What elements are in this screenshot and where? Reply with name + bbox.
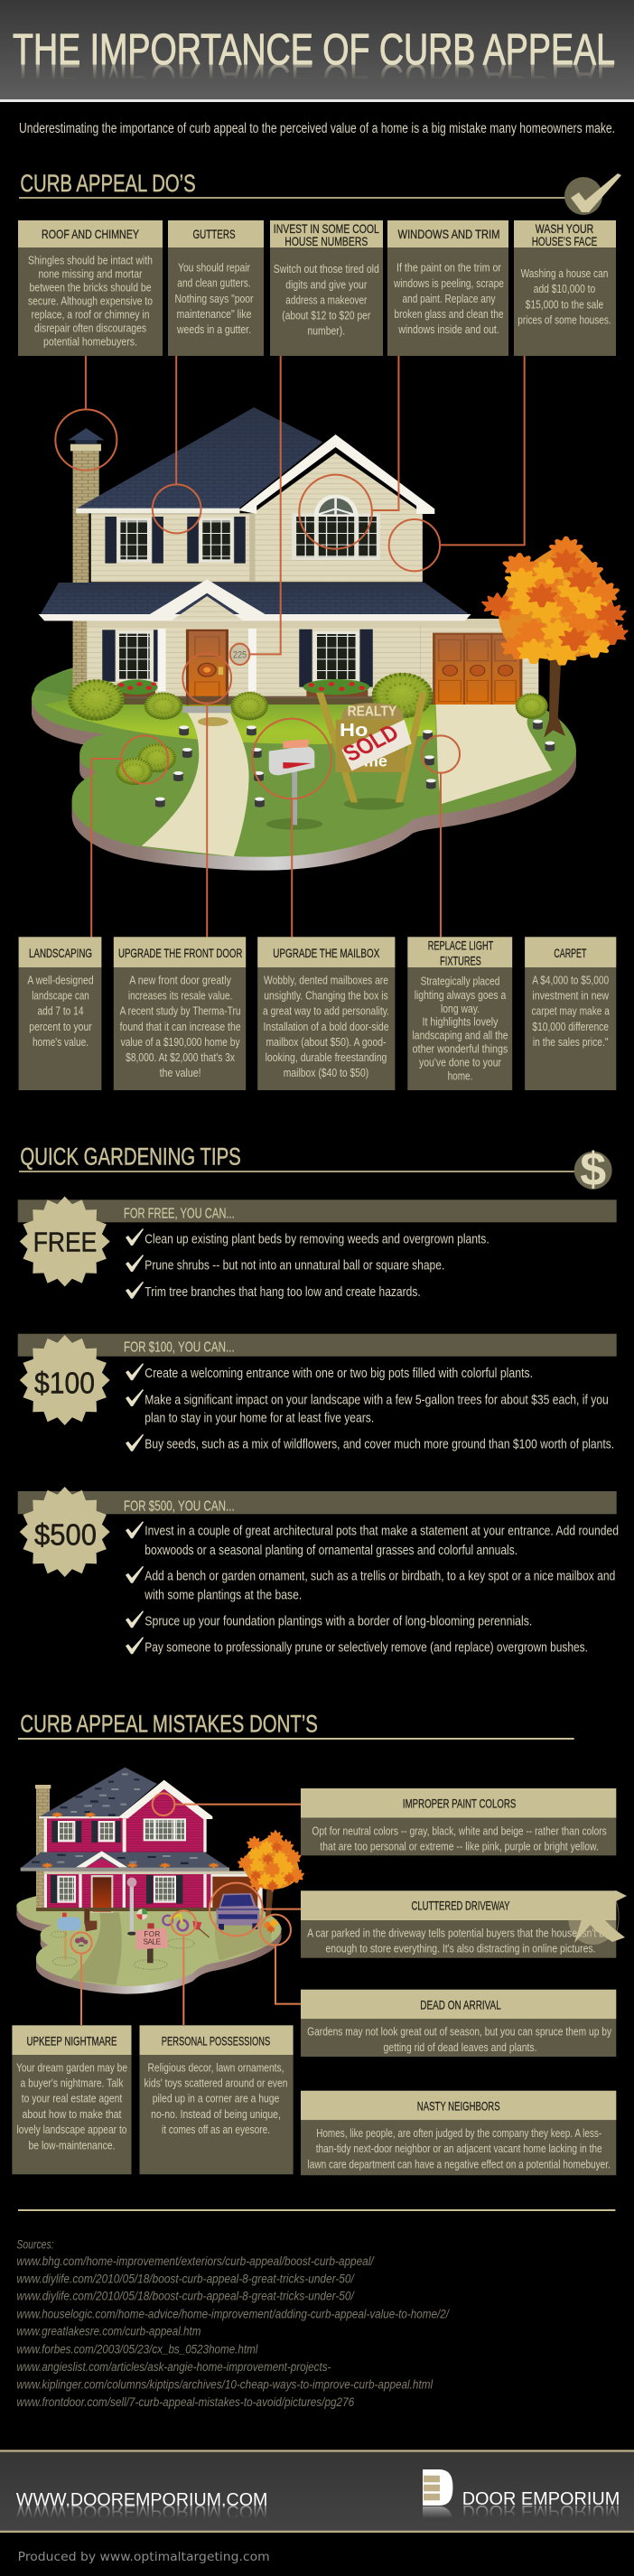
toys: [163, 1915, 210, 1937]
panel: nasty neighbors: NASTY NEIGHBORS: [417, 2099, 500, 2114]
section heading: curb appeal do's: [19, 170, 621, 215]
panel: personal possessions: PERSONAL POSSESSIONS: [162, 2033, 270, 2048]
panel: windows and trim: WINDOWS AND TRIM: [397, 227, 500, 241]
panel: wash your house's face: add $10,000 to: [534, 283, 595, 295]
callout circles and leader lines: [70, 1793, 301, 2025]
sources list: [16, 2237, 450, 2409]
icon: check mark: [564, 173, 621, 215]
realty sold sign: Ho: [340, 720, 368, 741]
tip group: $500: Spruce up your foundation plantings with a border of long-blooming perennials.: [145, 1614, 532, 1629]
production credit: Produced by www.optimaltargeting.com: [18, 2550, 270, 2564]
panel: cluttered driveway: [301, 1890, 616, 1958]
panel: cluttered driveway: CLUTTERED DRIVEWAY: [412, 1899, 510, 1913]
panel: carpet: in the sales price.": [533, 1036, 609, 1049]
panel: landscaping: LANDSCAPING: [29, 946, 92, 960]
beach ball: [136, 1909, 147, 1919]
website url: WWW.DOOREMPORIUM.COM: [16, 2490, 267, 2510]
tip group: $500: [18, 1487, 619, 1656]
door emporium logo: DOOR EMPORIUM: [462, 2489, 620, 2509]
chimney: [35, 1785, 51, 1908]
tip group: $100: plan to stay in your home for at least five years.: [145, 1410, 374, 1425]
panel: improper paint colors: IMPROPER PAINT COLORS: [403, 1797, 516, 1811]
walkway: [70, 1912, 122, 1985]
panel: windows and trim: windows inside and out.: [397, 323, 499, 336]
ground floor windows: [102, 629, 373, 691]
panel: roof and chimney: [18, 220, 163, 356]
badge: free: FREE: [33, 1227, 97, 1258]
panel: upgrade the mailbox: Wobbly, dented mailboxes are: [264, 974, 388, 986]
tip group: $500: FOR $500, YOU CAN...: [124, 1498, 235, 1514]
panel: roof and chimney: disrepair often discourages: [34, 322, 146, 334]
panel: windows and trim: [387, 220, 508, 356]
arched gable window: [292, 495, 380, 560]
panel: roof and chimney: between the bricks should be: [29, 282, 152, 294]
step: [182, 706, 231, 713]
panel: replace light fixtures: [407, 937, 512, 1090]
porch roof: [21, 1851, 229, 1871]
panel: personal possessions: kids' toys scattered around or even: [145, 2077, 288, 2090]
panel: landscaping: A well-designed: [27, 974, 94, 986]
front gable trim: [238, 434, 434, 514]
porch roof: [39, 583, 471, 621]
panel: nasty neighbors: [301, 2091, 616, 2175]
garden weeds: [51, 1931, 194, 1969]
house number plate: [231, 645, 248, 664]
panel: landscaping: percent to your: [29, 1021, 92, 1033]
panel: landscaping: add 7 to 14: [38, 1005, 84, 1018]
panel: replace light fixtures: REPLACE LIGHT: [428, 938, 494, 952]
ground floor: [36, 1871, 263, 1913]
sources list: www.forbes.com/2003/05/23/cx_bs_0523home.html: [16, 2342, 258, 2356]
illustration: beige house on island: [32, 356, 627, 937]
divider rule: [18, 2209, 615, 2211]
section heading: quick gardening tips: QUICK GARDENING TIPS: [20, 1143, 241, 1171]
panel: replace light fixtures: home.: [448, 1069, 472, 1082]
sources list: www.kiplinger.com/columns/kiptips/archives/10-cheap-ways-to-improve-curb-appeal.html: [16, 2377, 434, 2391]
tip group: free: FOR FREE, YOU CAN...: [124, 1207, 235, 1222]
panel: dead on arrival: getting rid of dead leaves and plants.: [383, 2041, 536, 2054]
callout circles and leader lines: [55, 356, 525, 937]
panel: replace light fixtures: Strategically placed: [421, 975, 499, 987]
panel: upgrade the mailbox: looking, durable freestanding: [266, 1051, 387, 1064]
panel: landscaping: landscape can: [32, 990, 89, 1003]
dead flowers: [75, 1937, 88, 1946]
panel: personal possessions: it comes off as an eyesore.: [162, 2123, 270, 2136]
leaf pile: [263, 1918, 279, 1934]
panel: upgrade the mailbox: UPGRADE THE MAILBOX: [273, 946, 380, 960]
walkway: [142, 712, 249, 856]
panel: carpet: $10,000 difference: [532, 1021, 609, 1033]
panel: upgrade the front door: value of a $190,000 home by: [121, 1036, 240, 1049]
panel: house numbers: HOUSE NUMBERS: [284, 234, 368, 248]
section heading: quick gardening tips: [19, 1143, 612, 1196]
realty sold sign: [316, 693, 427, 810]
ground floor siding: [87, 621, 421, 698]
panel: roof and chimney: ROOF AND CHIMNEY: [42, 227, 139, 241]
panel: landscaping: home's value.: [33, 1036, 89, 1049]
realty sold sign: me: [364, 752, 387, 770]
tip group: $500: with some plantings at the base.: [144, 1587, 302, 1602]
panel: upkeep nightmare: [12, 2025, 132, 2174]
panel: upgrade the front door: increases its resale value.: [128, 990, 232, 1003]
badge: free: [20, 1196, 110, 1286]
realty sold sign: REALTY: [348, 704, 396, 719]
panel: wash your house's face: $15,000 to the sale: [526, 298, 603, 311]
panel: roof and chimney: none missing and mortar: [38, 267, 143, 280]
porch gable: [149, 579, 266, 621]
panel: replace light fixtures: long way.: [441, 1003, 480, 1015]
panel: personal possessions: no-no. Instead of being unique,: [151, 2108, 281, 2121]
panel: personal possessions: piled up in a corner are a huge: [153, 2093, 279, 2105]
panel: wash your house's face: [514, 220, 616, 356]
tip group: free: Clean up existing plant beds by removing weeds and overgrown plants.: [145, 1232, 489, 1247]
panel: upkeep nightmare: about how to make that: [22, 2108, 122, 2121]
tip group: $100: [18, 1334, 617, 1452]
upper left window pair: [105, 517, 246, 564]
panel: upgrade the front door: A recent study by Therma-Tru: [120, 1005, 241, 1018]
sources list: www.frontdoor.com/sell/7-curb-appeal-mistakes-to-avoid/pictures/pg276: [16, 2395, 355, 2409]
panel: upkeep nightmare: UPKEEP NIGHTMARE: [27, 2033, 117, 2048]
panel: gutters: [168, 220, 264, 356]
tip group: $100: Create a welcoming entrance with one or two big pots filled with colorful plants.: [145, 1366, 533, 1381]
panel: personal possessions: Religious decor, lawn ornaments,: [148, 2061, 284, 2074]
panel: upgrade the front door: [114, 937, 246, 1090]
driveway: [215, 1915, 272, 1961]
panel: gutters: GUTTERS: [193, 227, 235, 241]
rocking chair: [84, 1909, 97, 1931]
house number plate: 225: [233, 649, 247, 660]
panel: house numbers: INVEST IN SOME COOL: [274, 221, 379, 236]
autumn tree: [238, 1831, 303, 1917]
front door: [186, 630, 228, 705]
sources list: www.diylife.com/2010/05/18/boost-curb-appeal-8-great-tricks-under-50/: [16, 2290, 355, 2303]
panel: upgrade the mailbox: [257, 937, 395, 1090]
for sale sign: FOR: [144, 1930, 161, 1938]
panel: gutters: weeds in a gutter.: [176, 323, 251, 336]
main roof: [39, 1768, 157, 1818]
sources list: www.houselogic.com/home-advice/home-improvement/adding-curb-appeal-value-to-home/2/: [16, 2307, 450, 2320]
tip group: free: Prune shrubs -- but not into an unnatural ball or square shape.: [145, 1258, 444, 1274]
mailbox: [266, 739, 322, 830]
upper storey: [44, 1787, 207, 1853]
sources list: www.diylife.com/2010/05/18/boost-curb-appeal-8-great-tricks-under-50/: [16, 2272, 355, 2285]
panel: wash your house's face: HOUSE'S FACE: [532, 234, 597, 248]
section heading: curb appeal do's: CURB APPEAL DO’S: [20, 170, 196, 197]
panel: house numbers: digits and give your: [285, 279, 367, 292]
panel: dead on arrival: DEAD ON ARRIVAL: [420, 1997, 501, 2011]
panel: upgrade the mailbox: Installation of a bold door-side: [264, 1021, 389, 1033]
garden lights: [155, 720, 555, 807]
mailbox: [57, 1913, 81, 1960]
panel: upgrade the front door: UPGRADE THE FRONT DOOR: [118, 946, 242, 960]
panel: replace light fixtures: landscaping and all the: [412, 1030, 508, 1042]
panel: upgrade the mailbox: a great way to add personality.: [263, 1005, 389, 1018]
panel: house numbers: number).: [307, 325, 345, 338]
panel: windows and trim: and paint. Replace any: [403, 293, 496, 305]
sources list: www.angieslist.com/articles/ask-angie-home-improvement-projects-: [16, 2360, 331, 2374]
tip group: $500: boxwoods or a seasonal planting of ornamental grasses and colorful annuals.: [145, 1543, 517, 1558]
sources list: www.bhg.com/home-improvement/exteriors/curb-appeal/boost-curb-appeal/: [16, 2254, 375, 2268]
panel: windows and trim: windows is peeling, scrape: [393, 277, 504, 290]
door emporium logo: [423, 2469, 620, 2521]
panel: upkeep nightmare: a buyer's nightmare. Talk: [20, 2077, 124, 2090]
parked car: [216, 1893, 259, 1930]
panel: upgrade the mailbox: mailbox (about $50). A good-: [266, 1036, 387, 1049]
garage door: [433, 633, 522, 705]
panel: house numbers: (about $12 to $20 per: [282, 310, 370, 322]
tip group: $100: FOR $100, YOU CAN...: [124, 1340, 235, 1356]
panel: roof and chimney: replace, a roof or chimney in: [31, 309, 150, 322]
panel: roof and chimney: secure. Although expensive to: [28, 294, 153, 307]
panel: upkeep nightmare: be low-maintenance.: [29, 2139, 116, 2151]
panel: gutters: and clean gutters.: [177, 277, 251, 290]
panel: personal possessions: [139, 2025, 294, 2174]
upper windows: [51, 1818, 186, 1843]
panel: gutters: maintenance" like: [177, 308, 252, 321]
panel: wash your house's face: Washing a house can: [521, 267, 608, 280]
panel: upkeep nightmare: Your dream garden may be: [16, 2061, 127, 2074]
panel: house numbers: Switch out those tired old: [274, 263, 379, 275]
icon: x mark: [569, 1890, 627, 1945]
panel: house numbers: [270, 220, 383, 356]
main roof: [76, 407, 322, 513]
website url: WWW.DOOREMPORIUM.COM: [16, 2501, 267, 2521]
badge: $500: $500: [34, 1517, 97, 1552]
shrubs: [69, 673, 548, 785]
panel: windows and trim: broken glass and clean the: [394, 308, 504, 321]
fallen leaves on roofs: [42, 1812, 219, 1868]
lamp post: [127, 1878, 136, 1936]
panel: replace light fixtures: you've done to your: [419, 1057, 501, 1069]
sources list: Sources:: [16, 2237, 54, 2251]
icon: dollar sign: $: [580, 1143, 606, 1196]
panel: gutters: Nothing says "poor: [175, 293, 253, 305]
panel: upgrade the mailbox: unsightly. Changing the box is: [264, 990, 388, 1003]
panel: landscaping: [19, 937, 101, 1090]
panel: house numbers: address a makeover: [285, 294, 367, 307]
for sale sign: [135, 1923, 168, 1963]
illustration: pink neglected house: [16, 1768, 303, 2025]
panel: wash your house's face: WASH YOUR: [536, 221, 593, 236]
island base: [16, 1894, 282, 1994]
section heading: curb appeal mistakes: CURB APPEAL MISTAKES DONT’S: [20, 1710, 318, 1737]
badge: $100: $100: [34, 1366, 95, 1400]
panel: wash your house's face: prices of some houses.: [517, 313, 611, 326]
panel: upgrade the mailbox: mailbox ($40 to $50): [284, 1067, 368, 1079]
driveway: [436, 705, 552, 804]
panel: improper paint colors: [301, 1788, 616, 1855]
panel: replace light fixtures: lighting always goes a: [415, 989, 506, 1002]
panel: dead on arrival: [301, 1990, 616, 2057]
realty sold sign: SOLD: [337, 721, 406, 766]
badge: $500: [20, 1487, 110, 1577]
panel: carpet: CARPET: [554, 946, 587, 960]
chimney: [68, 428, 105, 688]
panel: carpet: investment in new: [532, 990, 610, 1003]
upper storey siding: [91, 513, 255, 582]
tip group: free: [18, 1196, 617, 1300]
panel: carpet: [525, 937, 616, 1090]
tip group: free: Trim tree branches that hang too low and create hazards.: [145, 1284, 421, 1300]
panel: replace light fixtures: other wonderful things: [413, 1043, 508, 1056]
panel: upgrade the front door: A new front door greatly: [129, 974, 232, 986]
icon: dollar sign: [574, 1143, 612, 1196]
panel: replace light fixtures: FIXTURES: [440, 954, 481, 968]
flower boxes: [116, 679, 369, 696]
header banner: [0, 0, 634, 102]
panel: replace light fixtures: It highlights lovely: [423, 1016, 499, 1029]
panel: upkeep nightmare: lovely landscape appear to: [16, 2123, 127, 2136]
panel: upgrade the front door: $8,000. At $2,000 that's 3x: [126, 1051, 236, 1064]
panel: roof and chimney: potential homebuyers.: [43, 336, 137, 349]
panel: upkeep nightmare: to your real estate agent: [22, 2093, 123, 2105]
panel: gutters: You should repair: [178, 262, 250, 275]
tree: [483, 538, 627, 738]
footer band: [0, 2450, 634, 2533]
badge: $100: [20, 1335, 110, 1425]
panel: carpet: carpet may make a: [531, 1005, 610, 1018]
website url: [16, 2490, 267, 2521]
panel: carpet: A $4,000 to $5,000: [532, 974, 609, 986]
panel: windows and trim: If the paint on the trim or: [396, 262, 501, 275]
sources list: www.greatlakesre.com/curb-appeal.htm: [16, 2325, 200, 2338]
panel: roof and chimney: Shingles should be intact with: [28, 255, 153, 267]
panel: upgrade the front door: found that it can increase the: [120, 1021, 241, 1033]
for sale sign: SALE: [144, 1938, 161, 1946]
door emporium logo: DOOR EMPORIUM: [462, 2501, 620, 2521]
island base: [32, 667, 576, 871]
gable trim: [117, 1780, 212, 1819]
panel: upgrade the front door: the value!: [160, 1067, 201, 1079]
